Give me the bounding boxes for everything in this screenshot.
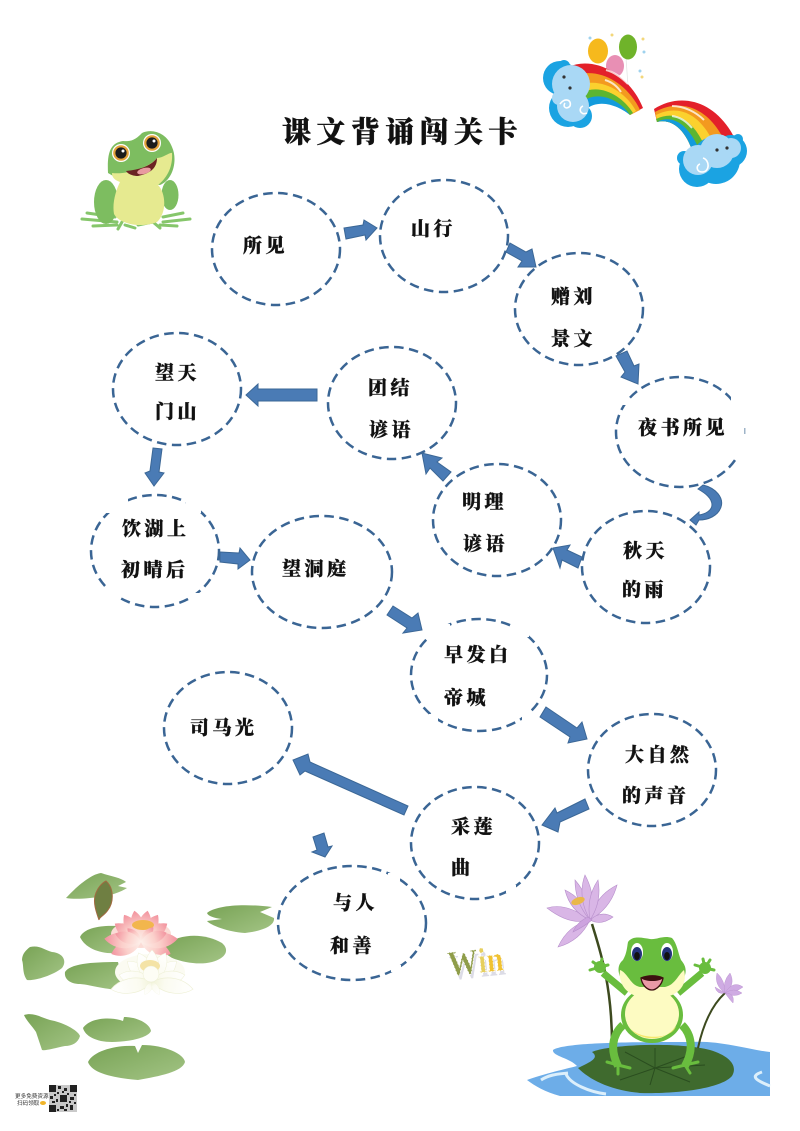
arrow: 早发白帝城 to 大自然的声音 bbox=[540, 707, 587, 743]
node: 与人和善 bbox=[278, 866, 426, 980]
arrow: 望天门山 to 饮湖上初晴后 bbox=[145, 448, 164, 486]
icon: QR code block bbox=[15, 1085, 77, 1112]
node: 采莲曲 bbox=[411, 787, 539, 899]
node: 明理谚语: 明理 bbox=[462, 491, 507, 513]
node: 夜书所见 bbox=[616, 377, 748, 487]
body bbox=[621, 987, 683, 1043]
icon: rainbow with cloud bbox=[654, 100, 747, 187]
icon: frog on lily pad with flowers bbox=[527, 875, 770, 1096]
node: 大自然的声音: 的声音 bbox=[622, 784, 690, 807]
small flower and stem bbox=[698, 993, 725, 1048]
icon: sitting frog bbox=[82, 131, 190, 229]
icon: QR code block: 更多免费资源 bbox=[15, 1092, 49, 1100]
node: 望洞庭 bbox=[252, 516, 392, 628]
node: 望洞庭: 望洞庭 bbox=[282, 557, 350, 580]
node: 早发白帝城 bbox=[411, 619, 547, 731]
arrow: 望洞庭 to 早发白帝城 bbox=[387, 606, 422, 633]
arrow: 饮湖上初晴后 to 望洞庭 bbox=[220, 548, 250, 569]
lily pad bbox=[578, 1045, 734, 1093]
node: 明理谚语: 谚语 bbox=[463, 532, 508, 555]
node: 与人和善: 与人 bbox=[333, 891, 378, 914]
node: 所见 bbox=[212, 193, 340, 305]
arms and hands bbox=[603, 973, 702, 993]
node: 秋天的雨: 秋天 bbox=[623, 539, 668, 562]
node: 所见: 所见 bbox=[243, 234, 288, 257]
node: 山行 bbox=[380, 180, 508, 292]
node: 司马光 bbox=[164, 672, 292, 784]
arrow: 大自然的声音 to 采莲曲 bbox=[542, 799, 589, 832]
node: 山行: 山行 bbox=[411, 218, 456, 240]
node: 饮湖上初晴后: 饮湖上 bbox=[122, 517, 190, 540]
node: 团结谚语: 谚语 bbox=[369, 418, 414, 441]
node: 望天门山: 门山 bbox=[155, 400, 200, 423]
arrow: 团结谚语 to 望天门山 bbox=[246, 384, 317, 406]
white lotus bbox=[110, 950, 194, 996]
arrow: 明理谚语 to 团结谚语 bbox=[422, 453, 451, 481]
node: 秋天的雨: 的雨 bbox=[622, 579, 667, 601]
lotus bud bbox=[94, 881, 112, 920]
arrow: to 与人和善 bbox=[312, 833, 332, 857]
node: 大自然的声音: 大自然 bbox=[625, 743, 693, 766]
arrow: 秋天的雨 to 明理谚语 bbox=[553, 545, 582, 568]
arrow: 采莲曲 to 司马光 bbox=[293, 754, 408, 815]
icon: rainbow with balloons bbox=[543, 34, 646, 128]
water bbox=[527, 1042, 770, 1096]
node: 夜书所见: 夜书所见 bbox=[638, 416, 728, 439]
decorative word: Win: Win bbox=[448, 943, 507, 989]
decorative word: Win: Win bbox=[446, 939, 505, 985]
legs and feet bbox=[613, 1025, 691, 1066]
node: 团结谚语: 团结 bbox=[368, 377, 413, 399]
node: 司马光: 司马光 bbox=[190, 716, 258, 739]
node: 秋天的雨 bbox=[582, 511, 710, 623]
title: 课文背诵闯关卡 bbox=[282, 115, 523, 149]
arrow: 赠刘景文 to 夜书所见 bbox=[616, 351, 639, 384]
node: 团结谚语 bbox=[328, 347, 456, 459]
arrow: 山行 to 赠刘景文 bbox=[506, 243, 536, 267]
node: 饮湖上初晴后: 初晴后 bbox=[121, 558, 189, 581]
node: 明理谚语 bbox=[433, 464, 561, 576]
node: 早发白帝城: 早发白 bbox=[444, 643, 512, 666]
arrow: 所见 to 山行 bbox=[344, 220, 377, 240]
icon: QR code block: 扫码领取 bbox=[17, 1099, 40, 1107]
node: 赠刘景文 bbox=[515, 253, 643, 365]
node: 望天门山: 望天 bbox=[155, 362, 200, 384]
node: 赠刘景文: 赠刘 bbox=[551, 285, 596, 308]
big flower and stem bbox=[592, 924, 612, 1045]
node: 与人和善: 和善 bbox=[330, 934, 375, 957]
node: 赠刘景文: 景文 bbox=[551, 327, 596, 350]
arrow: curved 夜书所见 to 秋天的雨 bbox=[690, 485, 722, 525]
node: 望天门山 bbox=[113, 333, 241, 445]
node: 饮湖上初晴后 bbox=[91, 495, 219, 607]
node: 大自然的声音 bbox=[588, 714, 716, 826]
icon: lotus pond illustration bbox=[22, 873, 274, 1080]
pink lotus bbox=[104, 909, 178, 960]
node: 早发白帝城: 帝城 bbox=[444, 686, 489, 709]
node: 采莲曲: 曲 bbox=[451, 857, 474, 879]
head bbox=[618, 937, 686, 990]
node: 采莲曲: 采莲 bbox=[451, 815, 496, 838]
